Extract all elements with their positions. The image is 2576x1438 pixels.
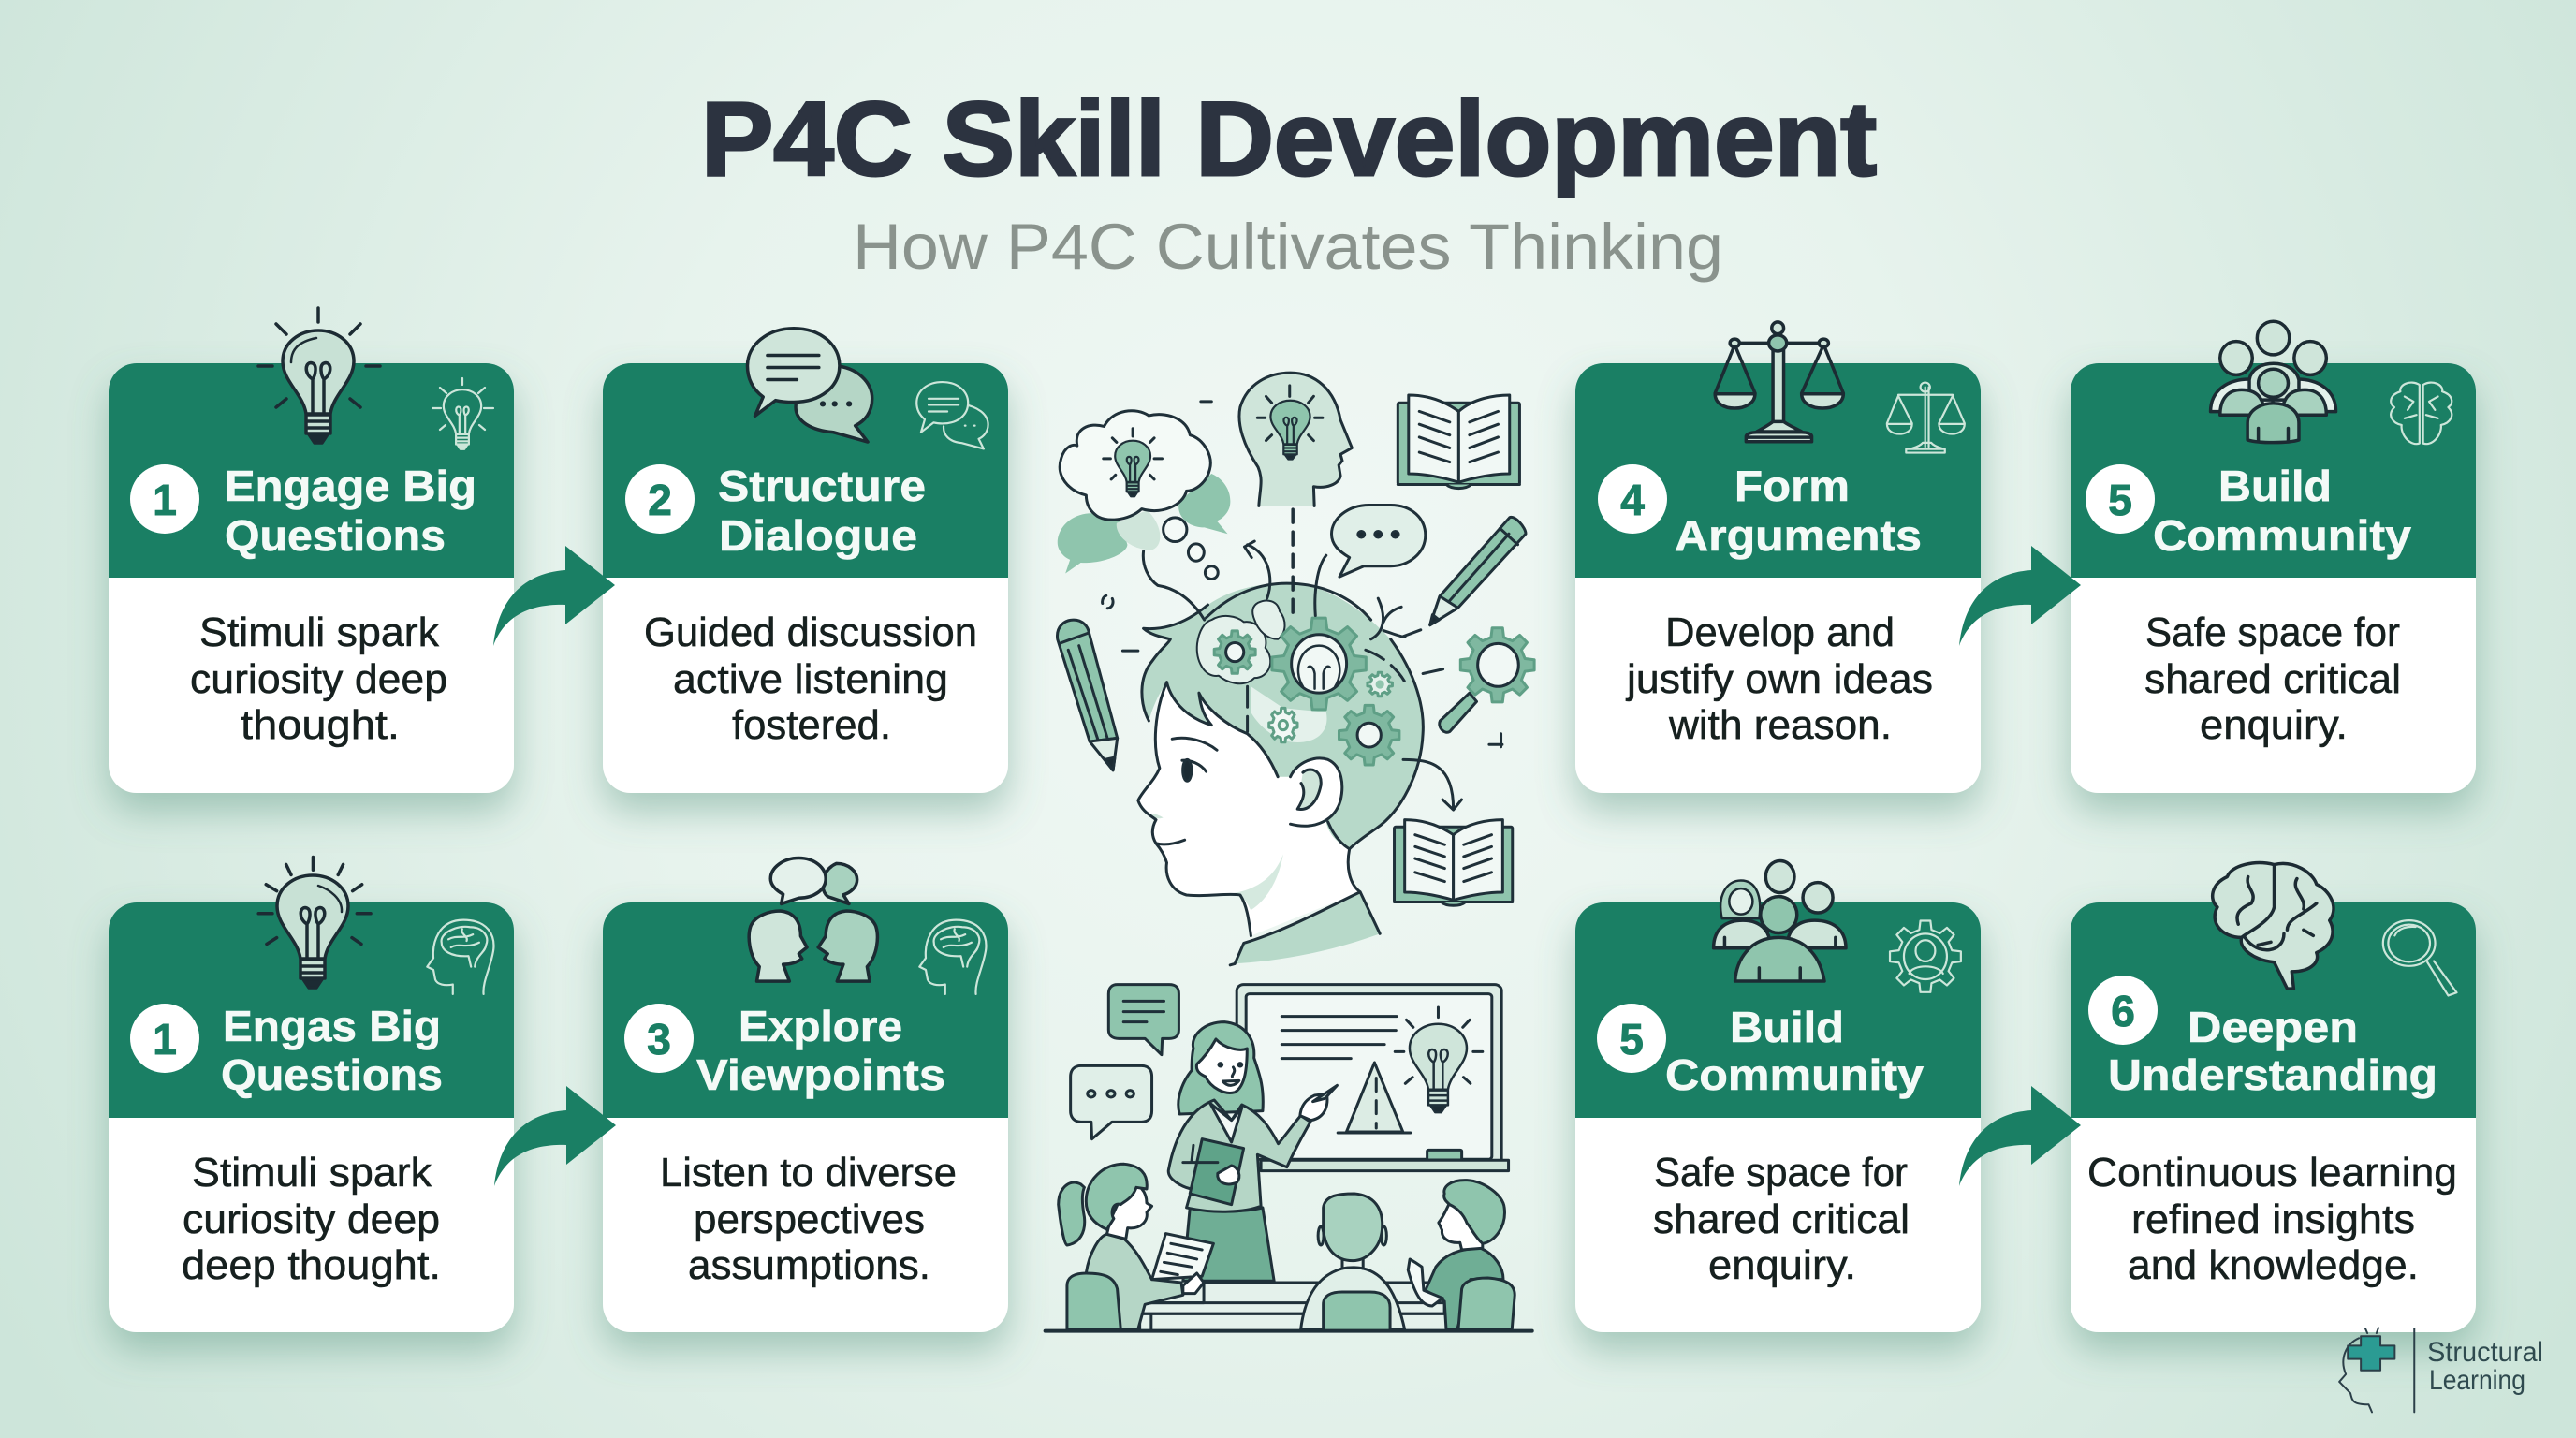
description: curiosity deep [190, 656, 447, 702]
icon: large light bulb [258, 857, 371, 988]
description [190, 609, 447, 748]
icon: gear with person [1890, 921, 1961, 992]
heading: Community [2153, 511, 2411, 560]
heading: Engas Big [223, 1002, 441, 1050]
number badge [1597, 1004, 1666, 1073]
card body [1575, 363, 1981, 793]
card body [603, 363, 1008, 793]
panel: card 3 Explore Viewpoints [603, 858, 1008, 1332]
number badge [624, 1004, 694, 1073]
description: thought. [241, 702, 400, 748]
description: Listen to diverse [660, 1150, 957, 1196]
student girl left [1059, 1164, 1213, 1329]
panel: card 5 Build Community (bottom) [1575, 860, 1981, 1332]
description: enquiry. [1708, 1242, 1856, 1288]
description: shared critical [1653, 1196, 1910, 1242]
arrow: card 5 to card 6 [1959, 1086, 2081, 1186]
description: Safe space for [2145, 609, 2400, 655]
description: perspectives [694, 1196, 925, 1242]
teacher [1168, 1022, 1337, 1281]
student boy right [1408, 1181, 1515, 1329]
dashed connectors and arrows [1103, 402, 1513, 810]
card header [109, 902, 514, 1118]
heading: Arguments [1675, 511, 1922, 560]
panel: card 1 Engas Big Questions (bottom) [109, 857, 514, 1332]
logo mark [2339, 1328, 2414, 1412]
description: Stimuli spark [199, 609, 440, 655]
whiteboard [1237, 985, 1509, 1171]
speech bubble with dots [1071, 1065, 1152, 1139]
description: fostered. [732, 702, 891, 748]
panel: card 2 Structure Dialogue [603, 329, 1008, 793]
logo text [2427, 1337, 2543, 1396]
description: Continuous learning [2087, 1150, 2457, 1196]
description: active listening [673, 656, 948, 702]
icon: head with brain [427, 920, 493, 994]
description: Stimuli spark [192, 1150, 432, 1196]
number badge: 5 [1619, 1015, 1644, 1064]
number badge: 5 [2108, 476, 2132, 524]
panel: card 6 Deepen Understanding [2071, 863, 2476, 1332]
icon: large group of people [2211, 321, 2336, 443]
icon: large speech bubbles [747, 329, 872, 442]
student boy centre back [1301, 1194, 1405, 1331]
description [2087, 1150, 2457, 1288]
description: deep thought. [182, 1242, 441, 1288]
description [1625, 609, 1933, 748]
logo text: Learning [2429, 1365, 2525, 1396]
card body [2071, 363, 2476, 793]
magnifying glass gear [1440, 628, 1534, 732]
illustration: teacher and students classroom [1046, 985, 1532, 1331]
description [644, 609, 977, 748]
description: curiosity deep [183, 1196, 440, 1242]
heading [718, 462, 926, 560]
heading: Viewpoints [696, 1050, 945, 1099]
icon: head with brain [919, 920, 986, 994]
heading: Build [2218, 462, 2332, 510]
heading: Community [1665, 1050, 1924, 1099]
description: Guided discussion [644, 609, 977, 655]
description: enquiry. [2200, 702, 2348, 748]
number badge: 6 [2111, 987, 2135, 1035]
number badge [2088, 976, 2158, 1045]
description: refined insights [2131, 1196, 2415, 1242]
heading [221, 1002, 443, 1099]
heading [1665, 1003, 1924, 1099]
heading [225, 462, 476, 560]
heading [2108, 1003, 2437, 1099]
speech bubbles behind cloud [1058, 474, 1230, 574]
number badge: 1 [153, 1015, 177, 1064]
number badge [625, 464, 695, 534]
description: assumptions. [688, 1242, 930, 1288]
card header [1575, 902, 1981, 1118]
icon: large balance scales [1715, 322, 1843, 442]
card header [603, 902, 1008, 1118]
thought cloud with bulb [1060, 411, 1210, 520]
number badge [2086, 464, 2155, 534]
heading: Explore [739, 1002, 902, 1050]
heading: Build [1730, 1003, 1844, 1051]
arrow: card 4 to card 5 [1959, 546, 2081, 646]
card body [109, 902, 514, 1332]
arrow: card 1 to card 3 [494, 1086, 616, 1186]
card header [109, 363, 514, 578]
heading: Structure [718, 462, 926, 510]
heading: Dialogue [719, 511, 917, 560]
heading [2153, 462, 2411, 560]
floor line [1046, 1329, 1532, 1333]
heading [1675, 462, 1922, 560]
heading [696, 1002, 945, 1099]
heading: Understanding [2108, 1050, 2437, 1099]
heading: Engage Big [225, 462, 476, 510]
number badge [130, 1004, 199, 1073]
description: shared critical [2144, 656, 2401, 702]
card body [603, 902, 1008, 1332]
logo: Structural Learning [2339, 1328, 2543, 1412]
number badge [130, 464, 199, 534]
description: justify own ideas [1625, 656, 1933, 702]
icon: small light bulb [432, 378, 493, 449]
icon: large light bulb [258, 308, 380, 443]
desk [1134, 1283, 1444, 1329]
card header [1575, 363, 1981, 578]
title: P4C Skill Development [701, 81, 1877, 198]
gears and ideas in head [1197, 601, 1399, 765]
card body [2071, 902, 2476, 1332]
heading: Questions [225, 511, 446, 560]
description: with reason. [1668, 702, 1892, 748]
open book bottom [1395, 820, 1513, 905]
number badge [1598, 464, 1667, 534]
card body [109, 363, 514, 793]
description: Safe space for [1654, 1150, 1908, 1196]
heading: Deepen [2188, 1003, 2358, 1051]
icon: small balance scales [1887, 383, 1965, 453]
pencil right [1430, 517, 1526, 625]
description [660, 1150, 957, 1288]
number badge: 2 [648, 476, 672, 524]
description [1653, 1150, 1910, 1288]
open book top [1398, 395, 1519, 489]
speech bubble with dots [1332, 505, 1426, 577]
number badge: 3 [647, 1015, 671, 1064]
speech bubble with lines [1108, 985, 1178, 1055]
icon: two heads facing with speech bubbles [749, 858, 877, 981]
icon: large brain [2213, 863, 2334, 989]
card header [2071, 902, 2476, 1118]
illustration: child thinking with ideas [1058, 373, 1534, 965]
child head [1138, 583, 1423, 965]
description [2144, 609, 2401, 748]
number badge: 1 [153, 476, 177, 524]
panel: card 1 Engage Big Questions [109, 308, 514, 793]
icon: small speech bubbles [916, 382, 988, 448]
description [182, 1150, 441, 1288]
arrow: card 1 to card 2 [493, 546, 615, 646]
icon: small brain [2391, 383, 2452, 444]
subtitle: How P4C Cultivates Thinking [853, 211, 1723, 283]
icon: magnifying glass [2383, 920, 2457, 995]
panel: card 5 Build Community (top) [2071, 321, 2476, 793]
card header [2071, 363, 2476, 578]
description: Develop and [1665, 609, 1895, 655]
description: and knowledge. [2128, 1242, 2419, 1288]
panel: card 4 Form Arguments [1575, 322, 1981, 793]
head profile with bulb [1239, 373, 1352, 506]
icon: large group of people [1714, 860, 1846, 981]
card header [603, 363, 1008, 578]
number badge: 4 [1620, 476, 1645, 524]
thought trail [1164, 518, 1218, 579]
heading: Questions [221, 1050, 443, 1099]
logo text: Structural [2427, 1337, 2543, 1368]
card body [1575, 902, 1981, 1332]
pencil left [1058, 620, 1118, 770]
heading: Form [1734, 462, 1850, 510]
